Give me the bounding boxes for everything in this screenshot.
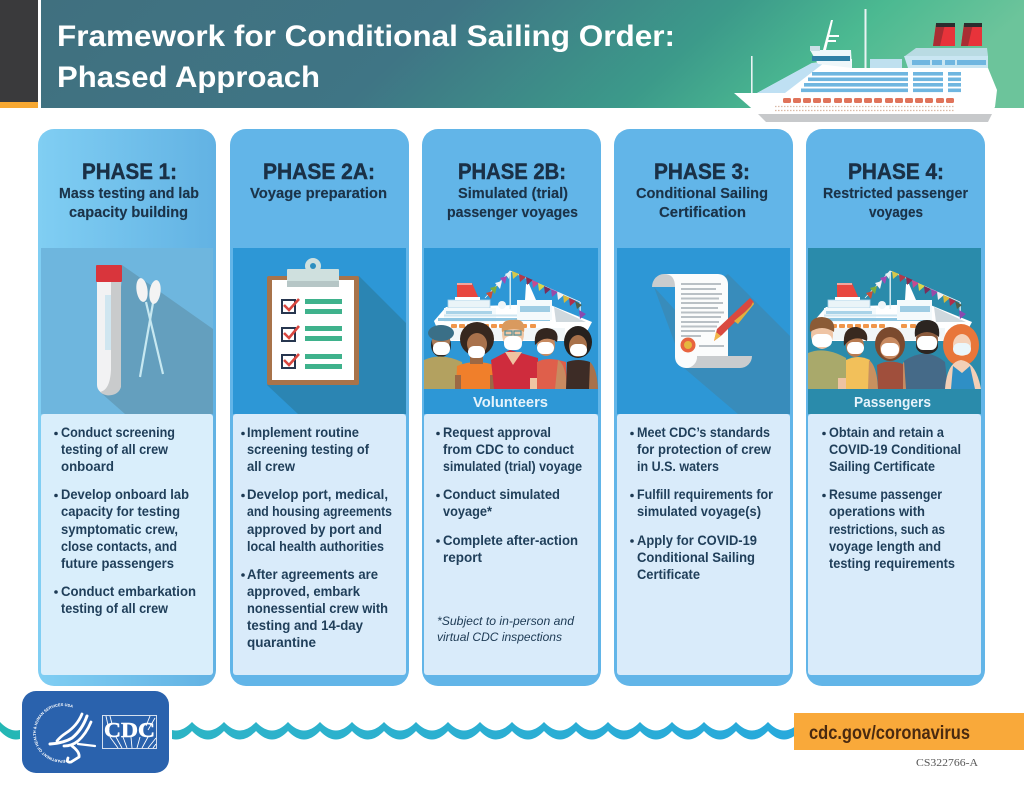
bullet list: Sailing Certificate xyxy=(829,459,935,474)
bullet list: simulated (trial) voyage xyxy=(443,459,582,474)
bullet list xyxy=(822,425,961,571)
bullet list: Conduct simulated xyxy=(443,487,560,502)
bullet list: Develop onboard lab xyxy=(61,487,189,502)
orange accent xyxy=(0,102,38,108)
subtitle xyxy=(636,186,768,221)
subtitle: passenger voyages xyxy=(447,205,578,221)
title xyxy=(57,20,675,94)
panel: phase 2B xyxy=(422,129,601,686)
bullet list: for protection of crew xyxy=(637,442,771,457)
card background xyxy=(614,129,793,686)
heading: PHASE 3: xyxy=(654,159,750,184)
bullet list: all crew xyxy=(247,459,295,474)
panel: phase 2A xyxy=(230,129,409,686)
bullet list: nonessential crew with xyxy=(247,601,388,616)
text panel xyxy=(617,414,790,675)
bullet list: operations with xyxy=(829,504,925,519)
bullet list: Develop port, medical, xyxy=(247,487,388,502)
bullet list: screening testing of xyxy=(247,442,369,457)
icon: cruise ship xyxy=(734,9,997,122)
person: short dark hair xyxy=(535,328,567,389)
bullet list: close contacts, and xyxy=(61,539,177,554)
subtitle xyxy=(59,186,199,221)
bullet list: approved, embark xyxy=(247,584,360,599)
bullet list xyxy=(436,425,582,565)
heading: PHASE 2B: xyxy=(458,159,566,184)
url banner xyxy=(794,713,1024,750)
subtitle: Certification xyxy=(659,205,746,221)
bullet list: capacity for testing xyxy=(61,504,180,519)
subtitle: capacity building xyxy=(69,205,188,221)
person: beard xyxy=(904,320,948,389)
logo: HHS and CDC xyxy=(20,691,172,773)
person: glasses xyxy=(491,320,538,389)
panel: phase 3 xyxy=(614,129,793,686)
bullet list: Apply for COVID-19 xyxy=(637,533,757,548)
footnote xyxy=(437,614,574,644)
footnote: virtual CDC inspections xyxy=(437,630,562,644)
header banner xyxy=(0,0,1024,108)
gradient title band xyxy=(41,0,1024,108)
subtitle xyxy=(447,186,578,221)
bullet list: future passengers xyxy=(61,556,174,571)
subtitle: Mass testing and lab xyxy=(59,186,199,202)
person: olive shirt xyxy=(808,317,848,389)
dark corner block xyxy=(0,0,38,102)
bullet list: simulated voyage(s) xyxy=(637,504,761,519)
person: curly hair xyxy=(455,322,497,389)
bullet list: testing of all crew xyxy=(61,601,168,616)
bullet list: from CDC to conduct xyxy=(443,442,574,457)
bullet list: voyage length and xyxy=(829,539,941,554)
card background xyxy=(422,129,601,686)
bullet list: Conduct embarkation xyxy=(61,584,196,599)
document code: CS322766-A xyxy=(916,757,978,769)
text panel xyxy=(808,414,981,675)
bullet list: and housing agreements xyxy=(247,504,392,519)
bullet list: Implement routine xyxy=(247,425,359,440)
bullet list: COVID-19 Conditional xyxy=(829,442,961,457)
illustration: certificate and pen xyxy=(617,248,790,414)
icon: HHS eagle seal: DEPARTMENT OF HEALTH & HUMAN SERVICES USA xyxy=(33,703,72,763)
bullet list xyxy=(630,425,774,582)
subtitle: Voyage preparation xyxy=(250,186,387,202)
bullet list: local health authorities xyxy=(247,539,384,554)
bullet list xyxy=(54,425,196,616)
heading: PHASE 1: xyxy=(82,159,177,184)
bullet list: Meet CDC’s standards xyxy=(637,425,770,440)
bullet list: voyage* xyxy=(443,504,493,519)
bullet list: symptomatic crew, xyxy=(61,522,178,537)
url banner: cdc.gov/coronavirus xyxy=(809,723,970,744)
card background xyxy=(230,129,409,686)
card background xyxy=(38,129,216,686)
wave divider xyxy=(0,722,800,740)
bullet list: in U.S. waters xyxy=(637,459,719,474)
panel: phase 4 xyxy=(806,129,985,686)
heading: PHASE 4: xyxy=(848,159,944,184)
title: Framework for Conditional Sailing Order: xyxy=(57,20,675,53)
bullet list: approved by port and xyxy=(247,522,382,537)
bullet list: Fulfill requirements for xyxy=(637,487,774,502)
subtitle: voyages xyxy=(869,205,923,221)
card background xyxy=(806,129,985,686)
person: yellow top xyxy=(844,327,878,389)
text panel xyxy=(233,414,406,675)
person: brown top xyxy=(875,327,906,389)
bullet list: report xyxy=(443,550,482,565)
illustration: ship and volunteers xyxy=(424,248,598,414)
icon: HHS eagle seal xyxy=(33,703,96,764)
heading: PHASE 2A: xyxy=(263,159,375,184)
bullet list: Complete after-action xyxy=(443,533,578,548)
illustration: test tube and swabs xyxy=(41,248,213,414)
bullet list: Conditional Sailing xyxy=(637,550,755,565)
subtitle: Simulated (trial) xyxy=(458,186,568,202)
caption band: Volunteers xyxy=(473,394,548,411)
person: red hair xyxy=(943,324,981,389)
text panel xyxy=(424,414,598,675)
bullet list: testing requirements xyxy=(829,556,955,571)
bullet list: restrictions, such as xyxy=(829,522,945,537)
bullet list: testing and 14-day xyxy=(247,618,363,633)
person: dark bob xyxy=(564,326,598,389)
subtitle: Restricted passenger xyxy=(823,186,968,202)
bullet list: Request approval xyxy=(443,425,551,440)
bullet list: Obtain and retain a xyxy=(829,425,944,440)
bullet list: Certificate xyxy=(637,567,700,582)
title: Phased Approach xyxy=(57,61,320,94)
bullet list: Conduct screening xyxy=(61,425,175,440)
bullet list: onboard xyxy=(61,459,114,474)
subtitle: Conditional Sailing xyxy=(636,186,768,202)
illustration: ship and passengers xyxy=(808,248,981,414)
subtitle xyxy=(823,186,968,221)
CDC mark xyxy=(102,716,156,748)
bullet list: After agreements are xyxy=(247,567,378,582)
caption band: Passengers xyxy=(854,394,931,411)
person: turban xyxy=(424,325,466,389)
bullet list: testing of all crew xyxy=(61,442,168,457)
footnote: *Subject to in-person and xyxy=(437,614,574,628)
panel: phase 1 xyxy=(38,129,216,686)
CDC mark: CDC xyxy=(104,718,155,742)
bullet list xyxy=(241,425,392,650)
text panel xyxy=(41,414,213,675)
bullet list: Resume passenger xyxy=(829,487,943,502)
illustration: clipboard checklist xyxy=(233,248,406,414)
bullet list: quarantine xyxy=(247,635,316,650)
